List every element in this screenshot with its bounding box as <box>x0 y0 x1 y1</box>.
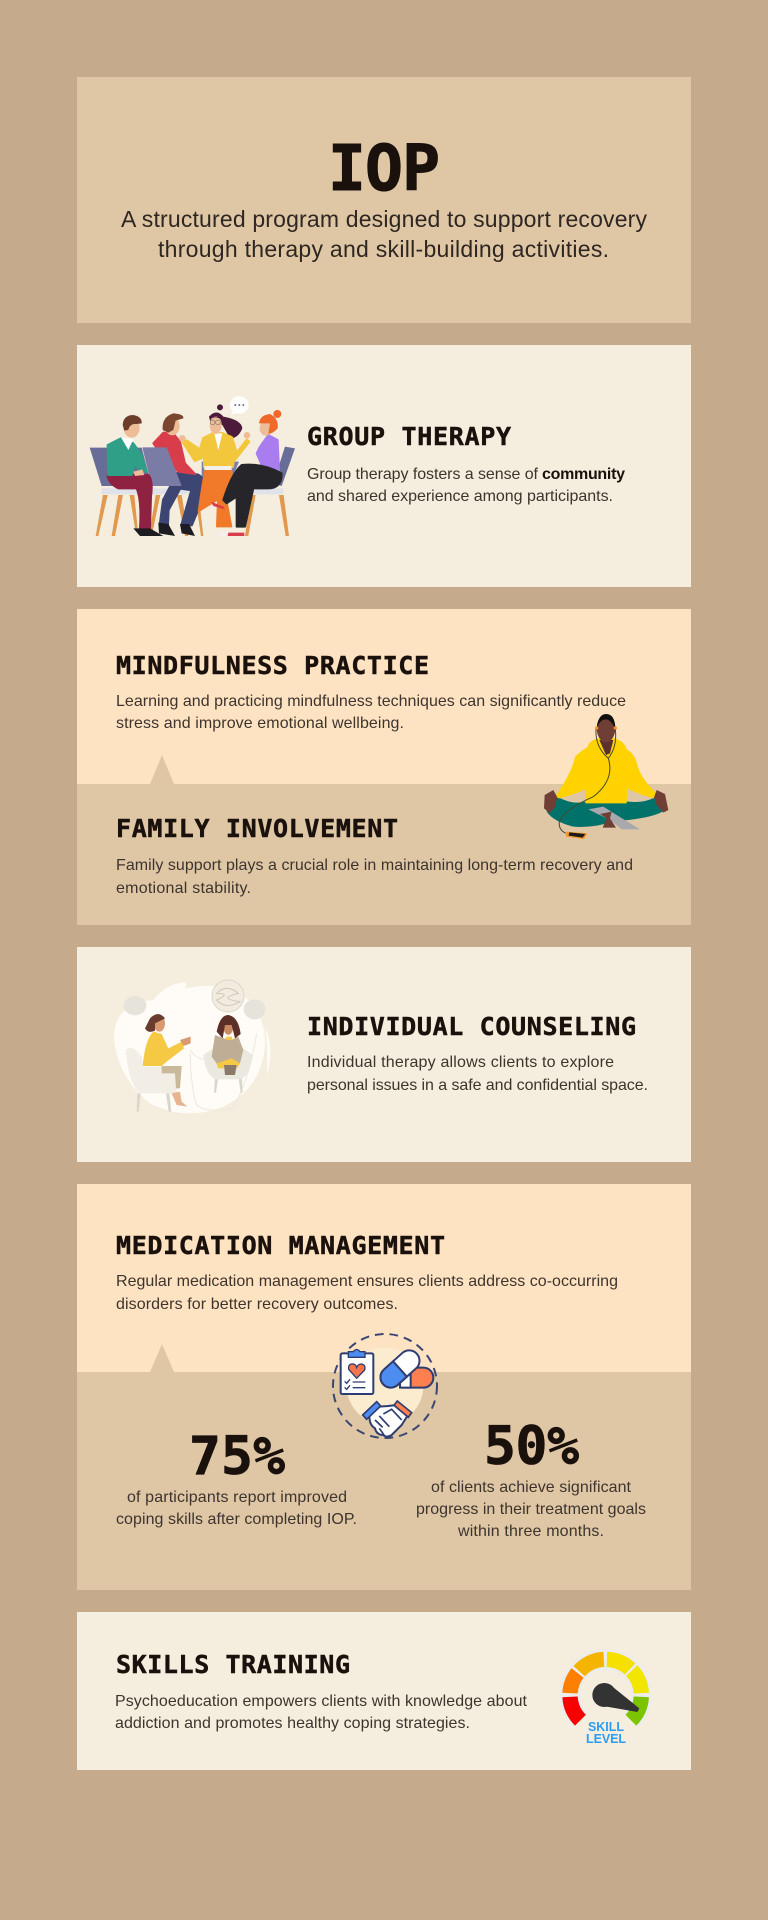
icon: skill level gauge: LEVEL <box>586 1732 626 1746</box>
subtitle <box>121 206 648 262</box>
illustration: meditating person <box>544 714 668 839</box>
speech bubble <box>230 396 249 415</box>
text: skills training: Psychoeducation empowers clients with knowledge about <box>115 1693 528 1710</box>
panel: statistics <box>77 1344 691 1590</box>
subtitle: through therapy and skill-building activities. <box>158 236 609 262</box>
subtitle: A structured program designed to support recovery <box>121 206 648 232</box>
stat: 75% <box>116 1426 357 1528</box>
heading: skills training: SKILLS TRAINING <box>116 1650 350 1679</box>
text: group therapy <box>307 466 625 505</box>
figure: man in red <box>153 413 205 536</box>
text: mindfulness: Learning and practicing mindfulness techniques can significantly reduce <box>116 693 626 710</box>
panel: family involvement <box>77 755 691 925</box>
stat: 75%: coping skills after completing IOP. <box>116 1511 357 1528</box>
panel: header <box>77 77 691 323</box>
icon: medication and handshake <box>333 1334 437 1438</box>
text: family: Family support plays a crucial role in maintaining long-term recovery and <box>116 857 633 874</box>
text: group therapy: and shared experience among participants. <box>307 488 613 505</box>
text: individual counseling: Individual therapy allows clients to explore <box>307 1054 614 1071</box>
heading: individual counseling: INDIVIDUAL COUNSELING <box>307 1012 636 1041</box>
text: family <box>116 857 633 897</box>
text: family: emotional stability. <box>116 880 251 897</box>
stat: 75%: 75% <box>189 1426 285 1487</box>
text: individual counseling: personal issues in a safe and confidential space. <box>307 1077 648 1094</box>
heading: medication management: MEDICATION MANAGEMENT <box>116 1231 445 1260</box>
figure: man in green <box>108 415 163 536</box>
panel: medication management <box>77 1184 691 1372</box>
text: medication management <box>116 1273 618 1313</box>
text: mindfulness: stress and improve emotional wellbeing. <box>116 715 404 732</box>
panel: group therapy <box>77 345 691 587</box>
text: group therapy: Group therapy fosters a sense of <box>307 466 539 483</box>
icon: skill level gauge <box>570 1659 641 1746</box>
text: medication management: disorders for better recovery outcomes. <box>116 1296 398 1313</box>
text: skills training <box>115 1693 528 1732</box>
illustration: group therapy <box>90 396 295 536</box>
text: individual counseling <box>307 1054 648 1094</box>
stat: 50%: within three months. <box>457 1523 604 1540</box>
panel: individual counseling <box>77 947 691 1162</box>
text: medication management: Regular medication management ensures clients address co-occurring <box>116 1273 618 1290</box>
figure: woman in yellow <box>179 404 250 527</box>
icon: skill level gauge: SKILL <box>588 1720 624 1734</box>
illustration: counseling session <box>114 980 270 1113</box>
stat: 50% <box>416 1416 646 1540</box>
stat: 50%: progress in their treatment goals <box>416 1501 646 1518</box>
title: IOP <box>328 132 440 205</box>
text: skills training: addiction and promotes healthy coping strategies. <box>115 1715 470 1732</box>
stat: 50%: 50% <box>484 1416 579 1477</box>
stat: 50%: of clients achieve significant <box>431 1479 632 1496</box>
pointer triangle <box>150 1344 174 1372</box>
panel: mindfulness practice <box>77 609 691 784</box>
heading: mindfulness: MINDFULNESS PRACTICE <box>116 651 429 680</box>
stat: 75%: of participants report improved <box>127 1489 347 1506</box>
figure: woman in purple <box>211 410 282 536</box>
heading: family: FAMILY INVOLVEMENT <box>116 814 398 843</box>
panel: skills training <box>77 1612 691 1770</box>
text: mindfulness <box>116 693 626 732</box>
heading: group therapy: GROUP THERAPY <box>307 422 511 451</box>
text: group therapy: community <box>542 466 625 483</box>
pointer triangle <box>150 755 174 784</box>
